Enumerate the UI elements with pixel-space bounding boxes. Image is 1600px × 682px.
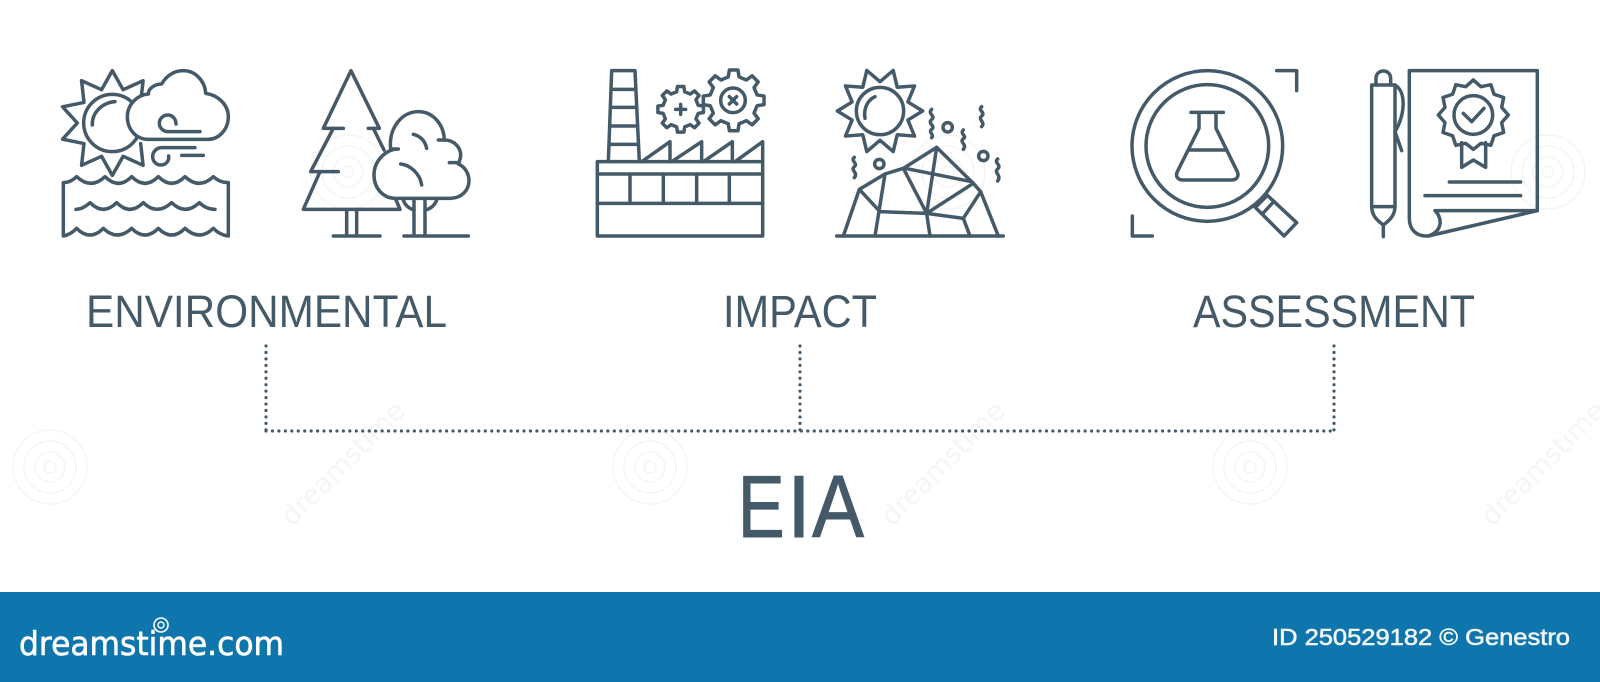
heading: ASSESSMENT: ASSESSMENT (1193, 286, 1475, 337)
watermark pattern (13, 135, 1600, 532)
icon: sun, cloud, wind and water (63, 71, 228, 236)
heading: IMPACT: IMPACT (723, 286, 877, 337)
icon: sun over melting rock (837, 70, 1003, 236)
title: EIA: E (738, 457, 785, 556)
footer logo: dreamstime.com: dreamstime.com (19, 624, 284, 663)
icon: magnifier with flask (1132, 71, 1297, 236)
watermark pattern: dreamstime (275, 395, 412, 532)
panel: assessment icons (1132, 71, 1537, 237)
icon: pen and certificate (1372, 71, 1537, 237)
title: EIA (738, 457, 865, 556)
heading: ENVIRONMENTAL: ENVIRONMENTAL (86, 286, 447, 337)
title: EIA: I (787, 457, 811, 556)
dotted connector (266, 346, 1334, 431)
panel: impact icons (597, 70, 1003, 236)
watermark pattern: dreamstime (875, 395, 1012, 532)
title: EIA: A (812, 458, 865, 556)
panel: environmental icons (63, 71, 469, 236)
footer bar (0, 592, 1600, 682)
icon: conifer and leafy trees (303, 71, 469, 236)
footer credit: image ID and author: ID 250529182 © Genestro (1272, 624, 1570, 650)
icon: factory with gears (597, 70, 764, 236)
